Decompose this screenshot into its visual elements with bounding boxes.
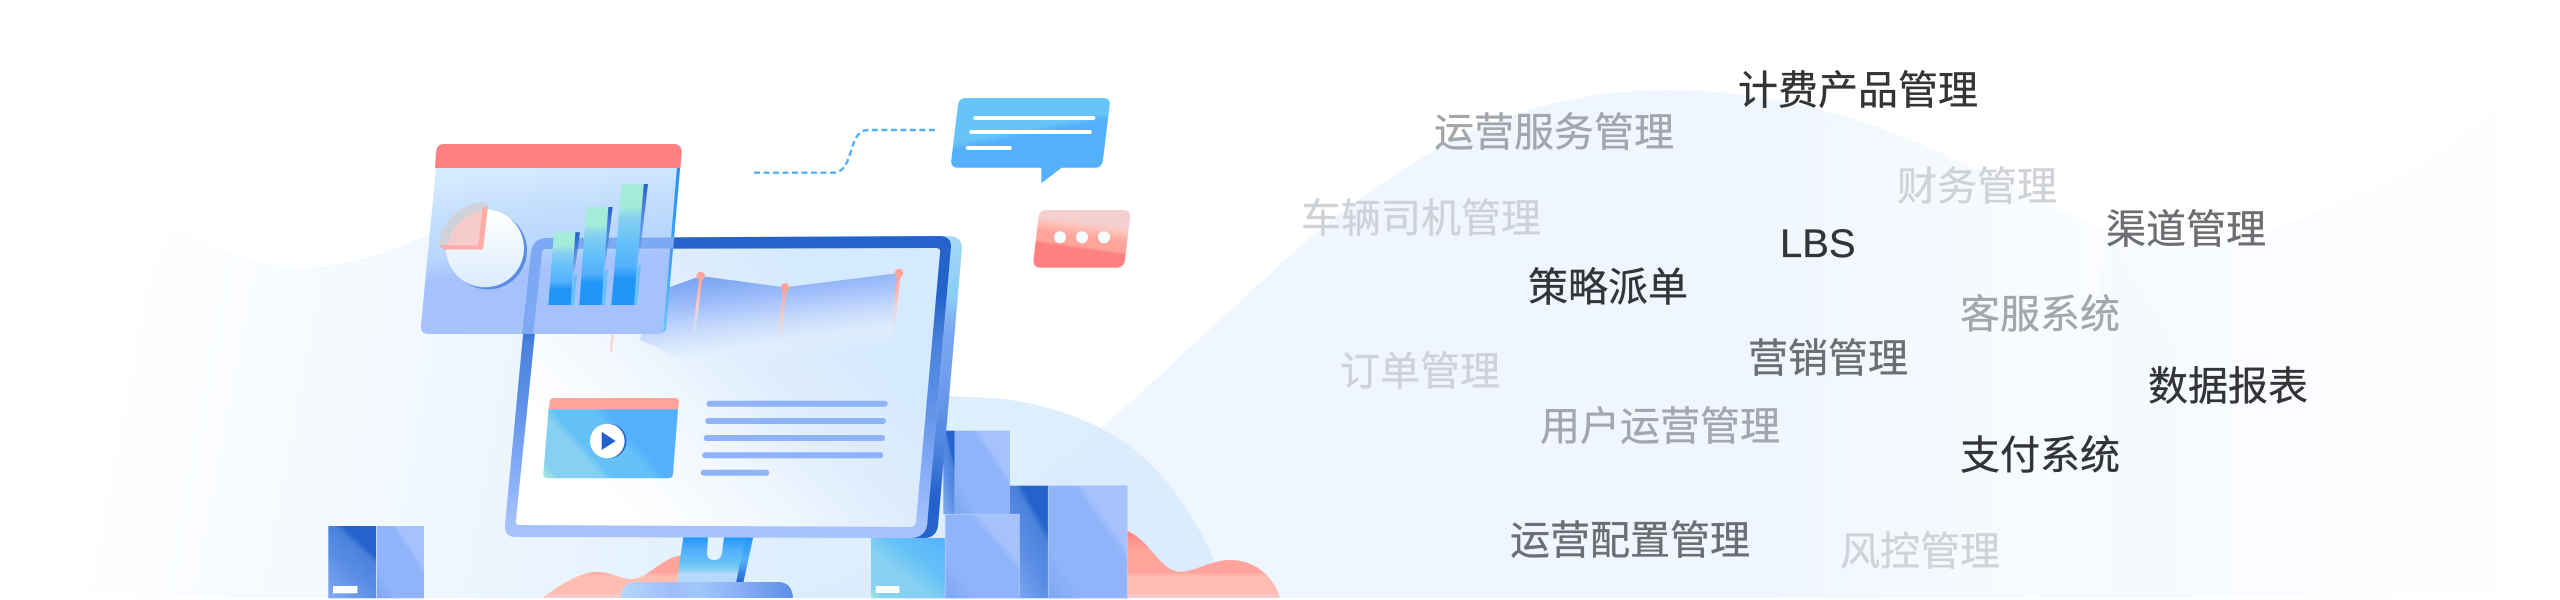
background: right faint wave (2030, 62, 2560, 598)
box: stack front (945, 514, 1019, 598)
monitor screen (516, 248, 940, 527)
monitor outer edge (910, 236, 962, 538)
monitor frame seen through card (527, 243, 677, 340)
box: stack top (943, 431, 1010, 514)
background: dome behind boxes (780, 397, 1232, 598)
word: data reports: 数据报表 (2148, 354, 2308, 412)
word: operations configuration management: 运营配置管理 (1510, 508, 1750, 566)
red blob right of boxes (1120, 528, 1280, 598)
monitor base (620, 582, 793, 598)
word: billing product management: 计费产品管理 (1738, 58, 1978, 116)
floating data card (421, 144, 682, 340)
word: strategy dispatch: 策略派单 (1528, 255, 1688, 313)
word: customer service system: 客服系统 (1960, 282, 2120, 340)
dashed connector (754, 130, 936, 173)
bar chart (548, 184, 648, 305)
card right edge (663, 168, 680, 333)
word: risk control management: 风控管理 (1840, 519, 2000, 577)
box: far left (328, 526, 424, 598)
background: large mountain (780, 90, 2330, 598)
word: marketing management: 营销管理 (1748, 326, 1908, 384)
box: mint box left of stack (871, 538, 945, 598)
background: left soft wave (42, 223, 960, 598)
monitor frame (505, 236, 951, 538)
word: vehicle and driver management: 车辆司机管理 (1301, 186, 1541, 244)
red blob left of stand (542, 555, 700, 598)
text lines on screen (704, 404, 885, 473)
word: finance management: 财务管理 (1897, 154, 2057, 212)
word: operations service management: 运营服务管理 (1434, 100, 1674, 158)
video card (543, 398, 679, 478)
word: channel management: 渠道管理 (2106, 197, 2266, 255)
word: payment system: 支付系统 (1960, 423, 2120, 481)
box: stack right (1010, 486, 1127, 598)
illustration and background (247, 90, 2200, 599)
chat bubble icon (951, 98, 1110, 183)
area chart on screen (610, 269, 903, 358)
monitor stand (677, 537, 753, 583)
word: user operations management: 用户运营管理 (1540, 394, 1780, 452)
word: LBS: LBS (1780, 222, 1856, 266)
card body (421, 168, 680, 334)
monitor (505, 236, 962, 538)
card red header (435, 144, 682, 168)
pie chart (438, 202, 527, 290)
word: order management: 订单管理 (1340, 339, 1500, 397)
message dots icon (1033, 210, 1130, 268)
